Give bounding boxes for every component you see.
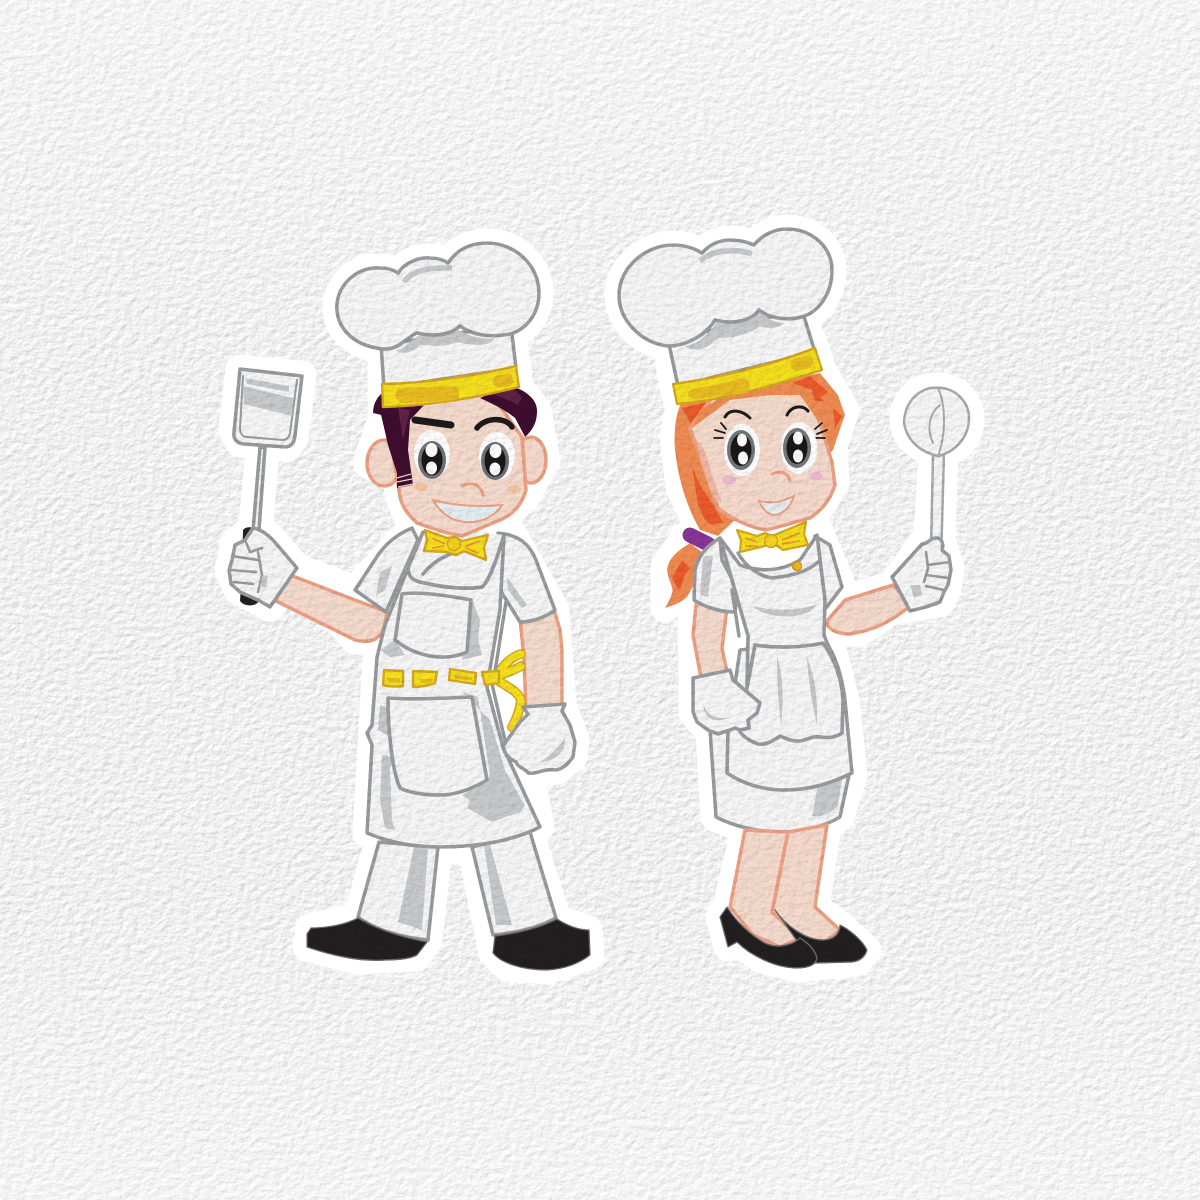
hair [373,385,537,488]
spatula [234,369,302,606]
cheeks [722,472,823,484]
skirt [710,700,849,832]
back shoe [775,910,867,963]
ladle [904,388,969,604]
bodice [720,535,830,690]
face [394,392,526,536]
spatula handle [240,447,265,606]
chef hat [337,243,539,407]
hat puff [619,229,832,346]
hat column [381,325,516,388]
sticker border: female chef [619,229,970,968]
waist belt patches [383,669,499,687]
trousers [358,832,556,940]
left arm [693,595,728,678]
apron upper pocket [395,593,471,657]
right arm [520,606,562,710]
sticker border: male chef [229,243,590,970]
eyelashes [714,423,827,438]
eyebrows [415,420,512,428]
left hand glove [503,704,575,773]
right shoe [493,919,590,970]
hat puff [337,243,539,349]
front shoe [720,907,817,968]
raised arm [826,585,912,634]
hat band [673,348,822,404]
button [792,562,802,570]
nose [772,472,790,481]
male chef [229,243,590,970]
raised arm [276,573,387,641]
ladle bowl [904,388,969,456]
cheeks [414,483,521,493]
hat band [382,366,519,407]
bow tie [424,530,488,560]
nose [462,484,483,495]
spatula blade [234,369,302,447]
overskirt [727,640,852,790]
apron tie ribbon [499,654,521,727]
left sleeve [694,538,738,612]
female chef [619,229,969,968]
shirt right sleeve [498,533,555,622]
hat shadow [396,330,495,353]
hat band highlights [688,355,813,399]
hat column [668,310,815,386]
bow tie [737,522,808,552]
hat crease [700,251,752,261]
hat band highlights [395,373,513,403]
forehead hair fringe [692,382,820,503]
waist apron [740,643,843,744]
eyes [414,430,515,480]
left shoe [307,918,427,960]
ears [367,437,546,486]
shirt torso [405,530,503,592]
right sleeve [812,536,842,608]
hair tie [690,535,708,544]
hat crease [404,268,452,282]
collar [408,532,504,588]
eyebrows [725,407,808,418]
chef hat [619,229,832,404]
apron body [367,535,540,847]
trouser leg left [358,842,438,940]
apron lower pocket [388,697,487,795]
hat shadow [684,312,785,350]
face [690,386,835,530]
ladle handle [930,453,944,604]
left hand glove [693,670,760,734]
raised hand glove [229,528,297,607]
legs [730,825,840,950]
eyes [724,422,817,476]
trouser leg right [472,832,556,935]
shirt left sleeve [355,528,418,612]
sleeve shading [376,566,527,608]
raised hand glove [892,538,951,611]
ponytail [665,543,703,608]
smile [759,496,794,515]
smile [433,500,502,522]
hair [675,373,845,536]
